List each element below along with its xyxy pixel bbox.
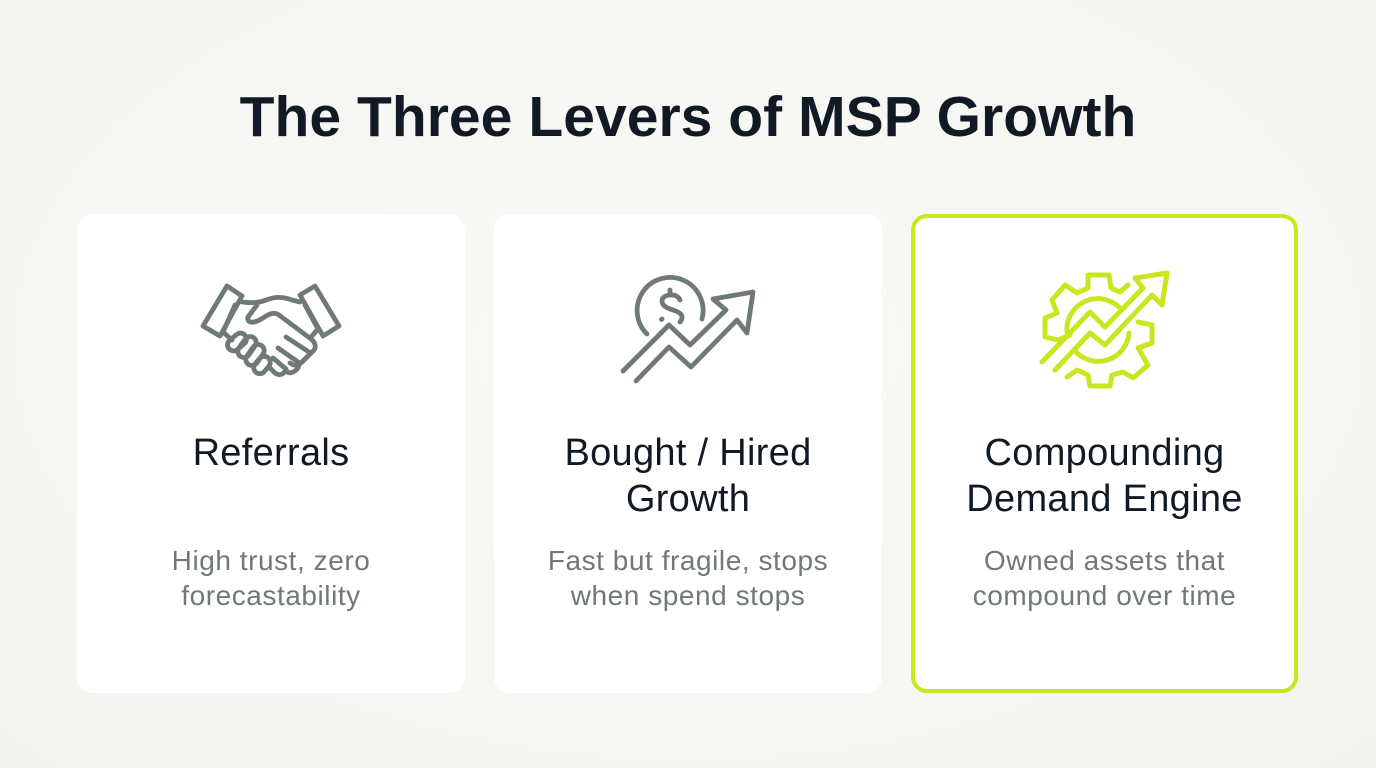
text: bought growth description [548,545,828,611]
text: bought growth description: when spend stops [571,580,805,611]
heading: compounding demand engine [966,432,1243,520]
title: The Three Levers of MSP Growth [240,85,1136,149]
text: compounding description: Owned assets that [984,545,1225,576]
text: referrals description: High trust, zero [172,545,370,576]
text: referrals description: forecastability [181,580,361,611]
text: bought growth description: Fast but fragile, stops [548,545,828,576]
heading: bought / hired growth [564,432,812,520]
heading: compounding demand engine: Demand Engine [966,478,1243,520]
panel: compounding demand engine [911,214,1298,693]
heading: referrals: Referrals [193,432,349,474]
panel: bought / hired growth [494,214,882,693]
text: compounding description [973,545,1236,611]
text: referrals description [172,545,370,611]
text: compounding description: compound over time [973,580,1236,611]
panel: referrals [77,214,465,693]
heading: compounding demand engine: Compounding [985,432,1224,474]
heading: bought / hired growth: Growth [626,478,750,520]
heading: bought / hired growth: Bought / Hired [564,432,812,474]
